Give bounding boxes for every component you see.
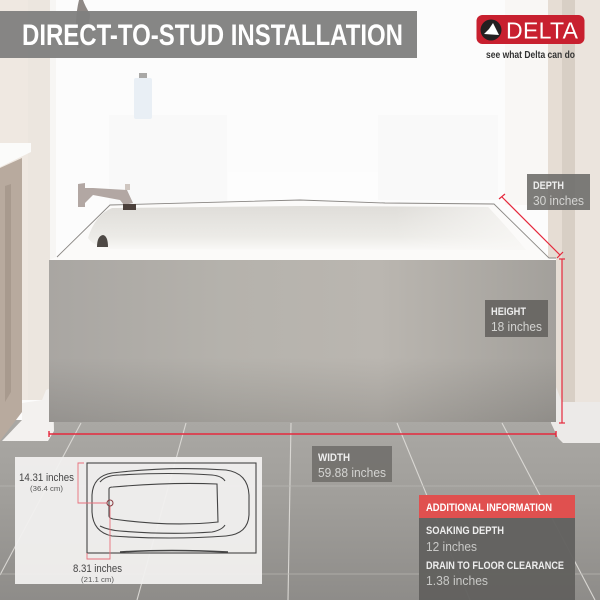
icon: Delta mark [480, 20, 502, 40]
label: width: 59.88 inches [318, 465, 386, 480]
label: depth: DEPTH [533, 180, 564, 192]
label: height: HEIGHT [491, 306, 526, 318]
floor [0, 420, 600, 600]
shampoo bottle [134, 73, 152, 119]
vanity cabinet [0, 143, 31, 441]
width dimension line [49, 431, 556, 437]
measurement text: 8.31 inches: 8.31 inches [73, 563, 122, 575]
title banner [0, 11, 417, 58]
shower head behind banner [76, 0, 90, 48]
panel: additional information [419, 495, 575, 600]
background: bathroom wall [0, 0, 600, 440]
height dimension line [559, 259, 565, 423]
measurement text: 21.1 cm: (21.1 cm) [81, 575, 115, 584]
panel: additional information: DRAIN TO FLOOR CLEARANCE [426, 560, 564, 572]
Delta logo: DELTA [506, 18, 579, 44]
bathtub [49, 200, 556, 422]
title banner: DIRECT-TO-STUD INSTALLATION [22, 19, 403, 52]
panel: additional information: 1.38 inches [426, 573, 488, 588]
panel header [419, 495, 575, 518]
faucet spout [78, 183, 136, 210]
baseboards [2, 387, 600, 443]
tub outline drawing [87, 463, 256, 553]
Delta logo [476, 15, 584, 61]
label: depth [527, 174, 590, 210]
drain measurement lines [78, 463, 113, 559]
panel: additional information: ADDITIONAL INFORMATION [426, 502, 552, 514]
Delta logo: see what Delta can do [486, 50, 575, 61]
label: depth: 30 inches [533, 193, 584, 208]
tub rim [49, 200, 556, 262]
apron [49, 260, 556, 422]
tub basin [88, 206, 526, 250]
label: height [485, 300, 548, 337]
panel: additional information: SOAKING DEPTH [426, 525, 504, 537]
label: width: WIDTH [318, 452, 350, 464]
panel: additional information: 12 inches [426, 539, 477, 554]
panel: tub top view diagram [15, 457, 262, 584]
measurement text: 14.31 inches: 14.31 inches [19, 472, 74, 484]
measurement text: 36.4 cm: (36.4 cm) [30, 484, 64, 493]
label: width [312, 446, 392, 482]
drain [97, 235, 108, 247]
label: height: 18 inches [491, 319, 542, 334]
depth dimension line [499, 194, 563, 258]
